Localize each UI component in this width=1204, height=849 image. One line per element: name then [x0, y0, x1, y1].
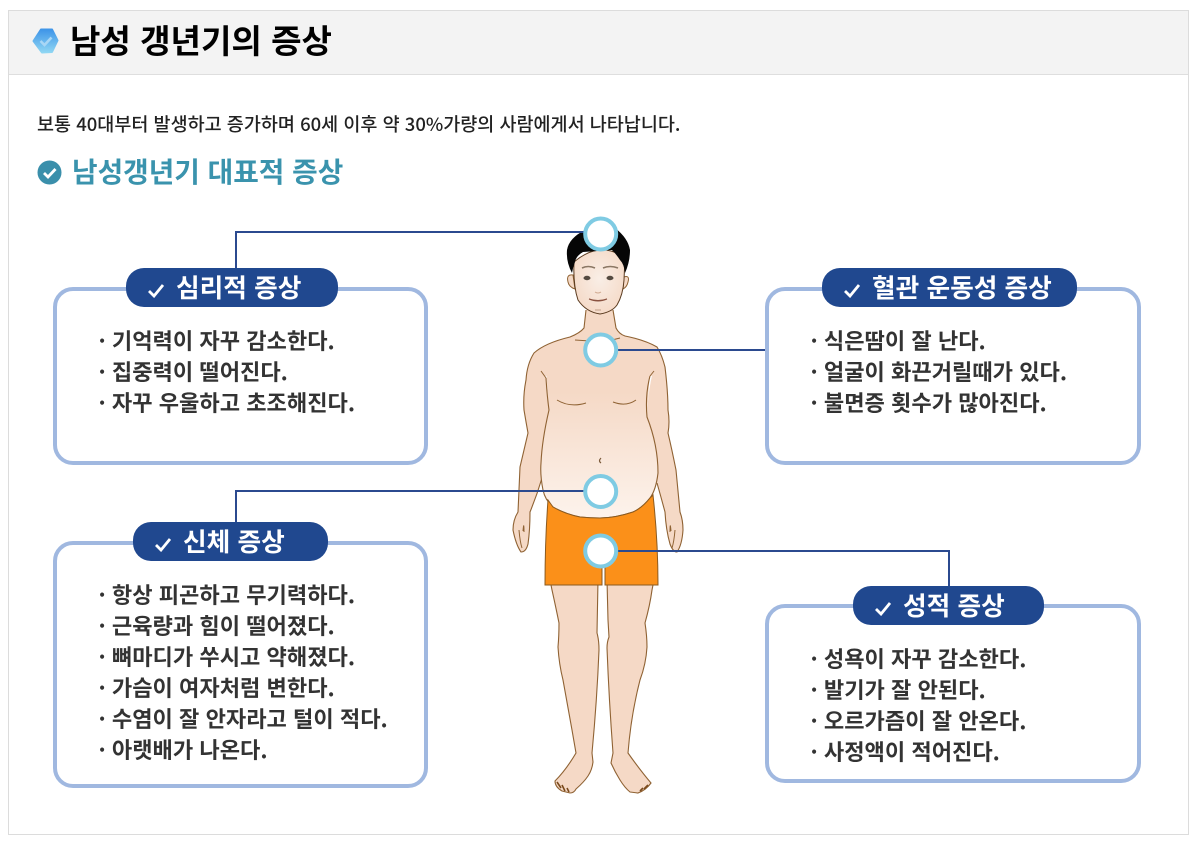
symptom list: · 자꾸 우울하고 초조해진다. — [98, 386, 355, 418]
section heading: 남성갱년기 대표적 증상 — [72, 151, 343, 191]
panel heading — [853, 586, 1044, 625]
panel heading: 성적 증상 — [903, 586, 1005, 623]
symptom list: · 식은땀이 잘 난다. — [810, 324, 986, 356]
symptom list: · 오르가즘이 잘 안온다. — [810, 704, 1026, 736]
symptom list: · 사정액이 적어진다. — [810, 735, 1000, 767]
marker: head — [585, 218, 616, 250]
symptom list: · 집중력이 떨어진다. — [98, 355, 288, 387]
symptom list: · 불면증 횟수가 많아진다. — [810, 386, 1047, 418]
panel heading: 신체 증상 — [183, 522, 285, 559]
title: 남성 갱년기의 증상 — [70, 15, 332, 63]
symptom list: · 뼈마디가 쑤시고 약해졌다. — [98, 640, 355, 672]
head — [567, 228, 630, 314]
marker: abdomen — [585, 476, 616, 507]
symptom list: · 발기가 잘 안된다. — [810, 673, 986, 705]
panel: vascular symptoms — [765, 268, 1141, 465]
symptom list — [98, 578, 388, 765]
panel: psychological symptoms — [53, 268, 428, 465]
torso and arms — [513, 310, 683, 552]
intro text: 보통 40대부터 발생하고 증가하며 60세 이후 약 30%가량의 사람에게서 나타납니다. — [37, 111, 680, 137]
symptom list: · 아랫배가 나온다. — [98, 733, 268, 765]
panel heading: 심리적 증상 — [176, 268, 301, 305]
panel box — [53, 541, 428, 788]
shorts — [545, 495, 658, 585]
symptom list: · 얼굴이 화끈거릴때가 있다. — [810, 355, 1067, 387]
panel heading: 혈관 운동성 증상 — [872, 268, 1052, 305]
icon: header hexagon check — [32, 28, 58, 54]
symptom list: · 성욕이 자꾸 감소한다. — [810, 642, 1026, 674]
symptom list — [810, 324, 1067, 418]
symptom list: · 근육량과 힘이 떨어졌다. — [98, 609, 335, 641]
panel: physical symptoms — [53, 522, 428, 788]
symptom list — [810, 642, 1026, 767]
symptom list: · 기억력이 자꾸 감소한다. — [98, 324, 335, 356]
marker: chest — [585, 334, 616, 366]
connector lines — [236, 232, 949, 587]
panel heading — [133, 522, 328, 561]
panel box — [765, 604, 1141, 783]
legs — [550, 580, 654, 793]
marker: groin — [585, 536, 616, 566]
panel box — [53, 287, 428, 465]
symptom list: · 항상 피곤하고 무기력하다. — [98, 578, 355, 610]
symptom list: · 가슴이 여자처럼 변한다. — [98, 671, 335, 703]
panel heading — [126, 268, 338, 307]
header bar — [9, 11, 1188, 75]
panel: sexual symptoms — [765, 586, 1141, 783]
icon: section check circle — [38, 160, 62, 184]
panel box — [765, 287, 1141, 465]
symptom list — [98, 324, 355, 418]
symptom list: · 수염이 잘 안자라고 털이 적다. — [98, 702, 388, 734]
panel heading — [822, 268, 1077, 307]
